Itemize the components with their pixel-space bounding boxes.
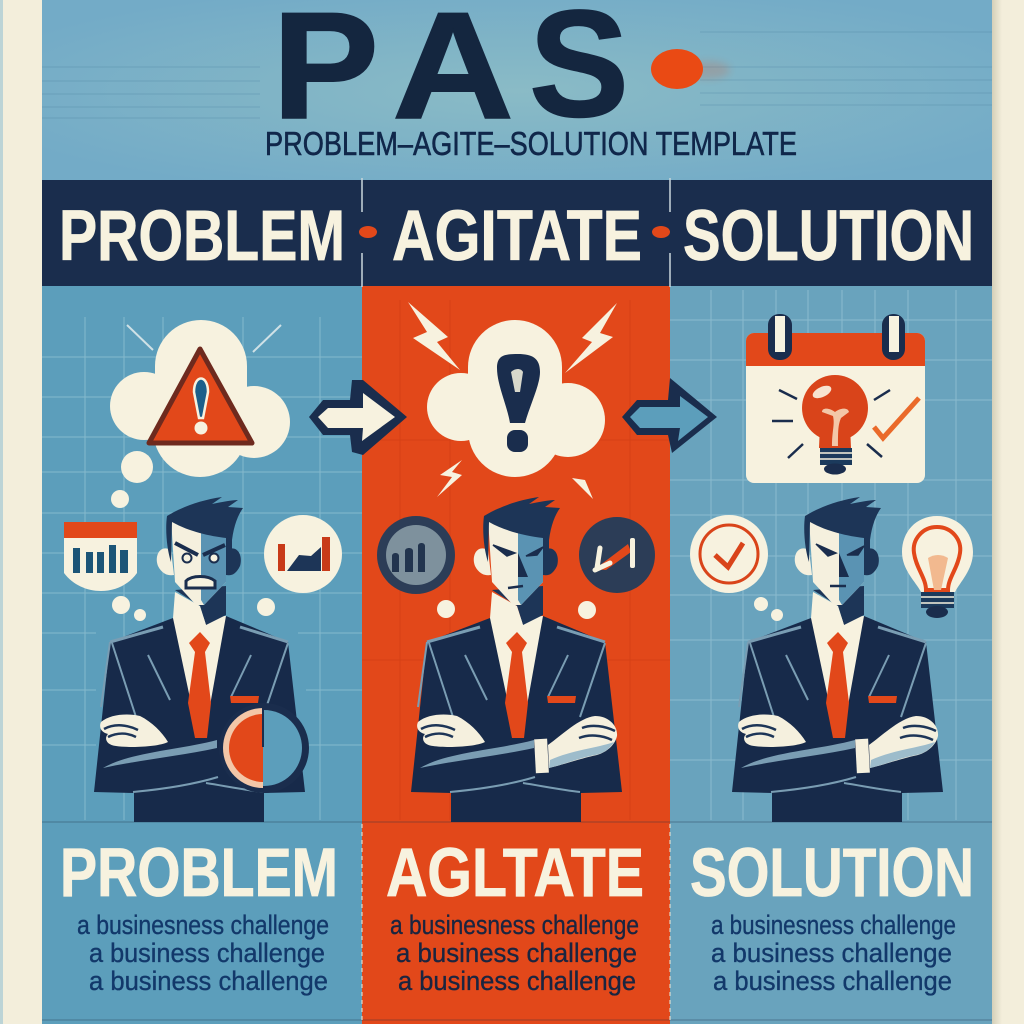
icon: dark chart badge xyxy=(377,516,455,594)
icon: chart badge xyxy=(264,515,342,593)
agitate thought cloud with exclamation xyxy=(408,302,617,499)
thought bubbles xyxy=(437,600,596,619)
text block: solution: a business challenge xyxy=(711,938,952,968)
text block: problem: a businesness challenge xyxy=(77,910,329,940)
panel: agitate background xyxy=(362,286,670,1024)
separator dot xyxy=(652,226,670,238)
icon: dark check badge xyxy=(579,517,655,593)
text block: problem: a business challenge xyxy=(89,938,325,968)
title accent dot xyxy=(651,49,730,89)
heading: agitate: AGITATE xyxy=(392,197,642,276)
text block: agitate: a business challenge xyxy=(396,938,637,968)
text block: agitate: a businesness challenge xyxy=(390,910,639,940)
text block: agitate: AGLTATE xyxy=(386,834,644,911)
text block: problem: PROBLEM xyxy=(60,834,338,911)
icon: clock xyxy=(219,703,309,793)
brows, nose and mouth xyxy=(816,544,864,556)
text block: solution xyxy=(690,834,974,996)
icon: check badge xyxy=(690,515,768,593)
brows, nose and mouth xyxy=(493,545,543,556)
icon: warning triangle xyxy=(149,349,252,443)
header band xyxy=(42,178,992,287)
folded arm hand xyxy=(869,716,938,768)
icon: lightbulb badge xyxy=(902,516,973,618)
figure: problem businessman xyxy=(94,497,309,822)
icon: lightning bolts xyxy=(408,302,617,499)
text block: solution: a business challenge xyxy=(713,966,952,996)
thought bubbles xyxy=(112,596,275,621)
icon: lightbulb xyxy=(802,375,868,474)
icon: check xyxy=(874,398,919,438)
rays xyxy=(772,390,890,458)
icon: exclamation mark xyxy=(497,354,540,452)
arrow: problem to agitate xyxy=(309,380,407,455)
angry brows and mouth xyxy=(175,543,225,555)
icon: calendar chart badge xyxy=(64,522,137,591)
problem thought cloud with warning xyxy=(110,320,290,508)
arrow: agitate to solution xyxy=(622,378,717,453)
text block: problem: a business challenge xyxy=(89,966,328,996)
title xyxy=(272,0,629,151)
subtitle: PROBLEM–AGITE–SOLUTION TEMPLATE xyxy=(265,125,797,162)
text block: agitate: a business challenge xyxy=(398,966,636,996)
thought bubbles xyxy=(754,597,783,621)
folded arm hand xyxy=(548,716,617,768)
header background xyxy=(42,0,992,182)
solution calendar with lightbulb xyxy=(746,314,925,483)
heading: problem: PROBLEM xyxy=(59,197,345,276)
text block: agitate xyxy=(386,834,644,996)
panel: problem background xyxy=(42,286,362,1024)
text block: problem xyxy=(60,834,338,996)
figure: agitate businessman xyxy=(411,497,622,822)
panel: solution background xyxy=(670,286,992,1024)
text block: solution: a businesness challenge xyxy=(711,910,956,940)
separator dot xyxy=(359,226,377,238)
figure: solution businessman xyxy=(732,497,943,822)
